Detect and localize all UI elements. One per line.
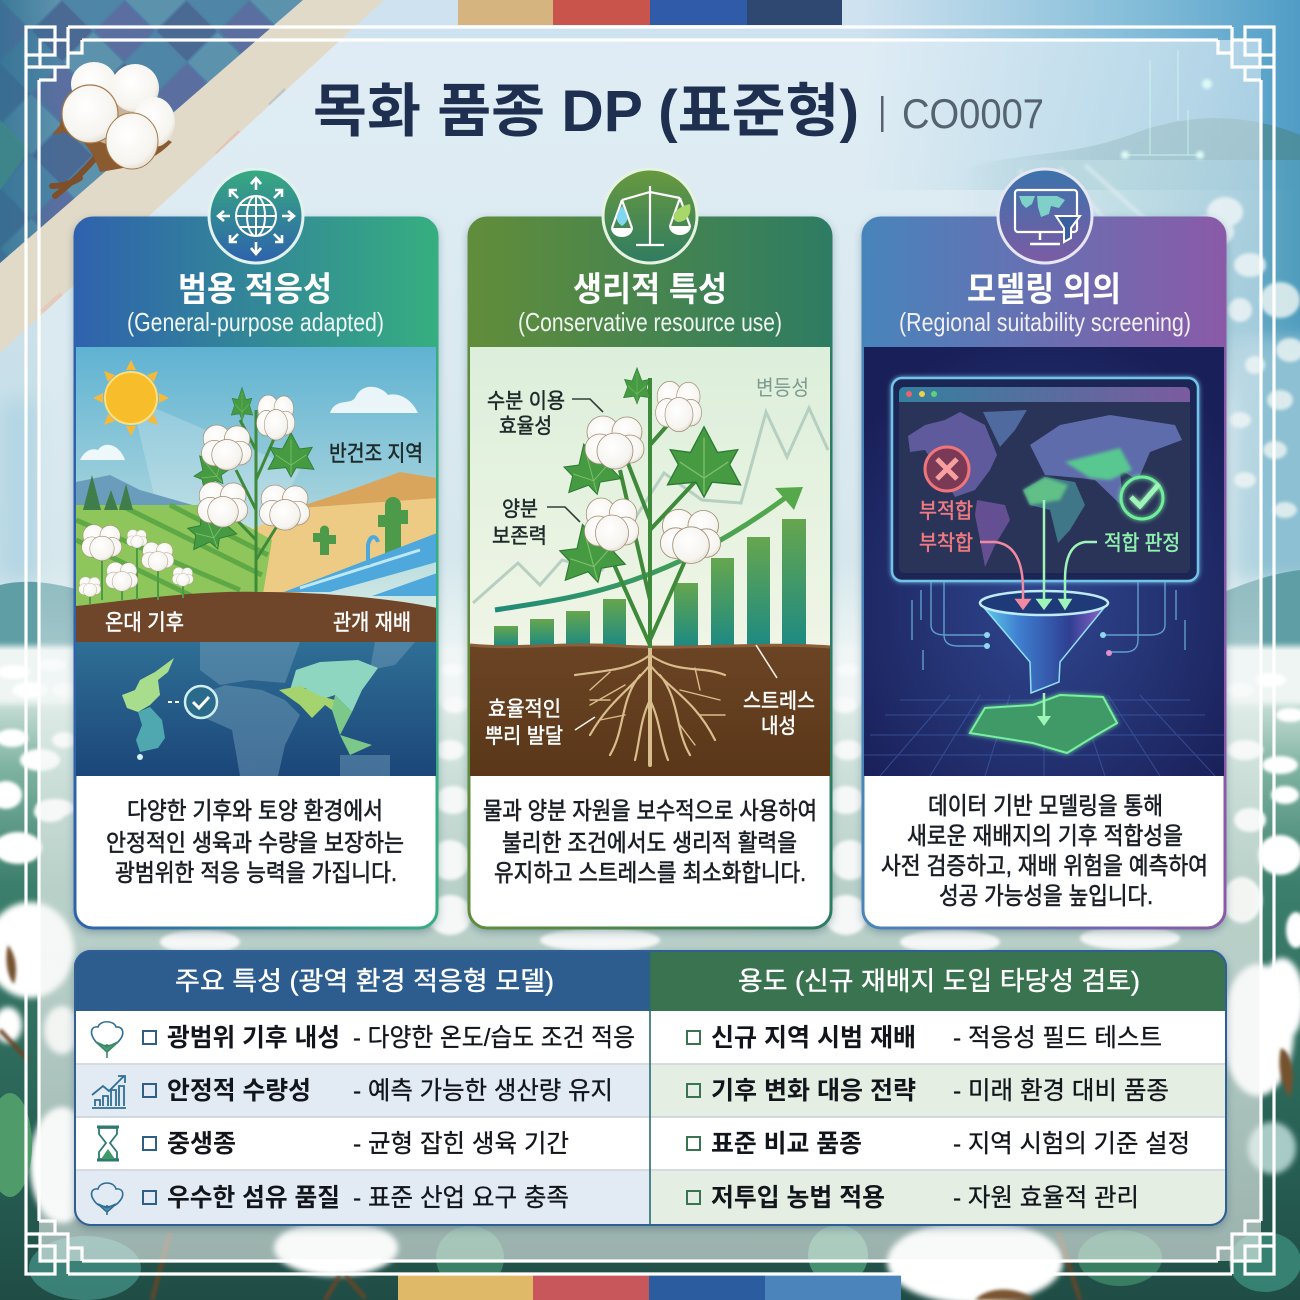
label: 반건조 지역 — [329, 441, 423, 466]
label: 온대 기후 — [105, 610, 184, 635]
right column rows: - 미래 환경 대비 품종 — [953, 1077, 1169, 1105]
left column rows: 광범위 기후 내성 — [167, 1024, 340, 1052]
panel: modeling significance — [863, 169, 1225, 928]
label: 뿌리 발달 — [485, 725, 563, 748]
label: 내성 — [761, 715, 796, 738]
left column rows: - 예측 가능한 생산량 유지 — [353, 1077, 613, 1105]
icon: cotton — [92, 1022, 123, 1058]
description: 다양한 기후와 토양 환경에서 — [127, 798, 383, 825]
left column rows: 안정적 수량성 — [167, 1077, 311, 1105]
fabric corner — [0, 0, 384, 353]
large bolls — [0, 878, 1300, 1300]
right column rows: 신규 지역 시범 재배 — [711, 1024, 916, 1052]
screen — [892, 378, 1198, 581]
left column rows — [167, 1024, 635, 1212]
right column header — [650, 951, 1226, 1011]
right column rows: - 자원 효율적 관리 — [953, 1184, 1139, 1212]
description: 성공 가능성을 높입니다. — [939, 883, 1153, 910]
icon: globe with arrows — [209, 169, 303, 263]
heading: 용도 (신규 재배지 도입 타당성 검토) — [738, 966, 1140, 996]
label: 관개 재배 — [333, 610, 411, 635]
description — [881, 793, 1208, 910]
description — [483, 798, 817, 887]
left column rows: - 표준 산업 요구 충족 — [353, 1184, 569, 1212]
right column rows: - 적응성 필드 테스트 — [953, 1024, 1162, 1052]
description: 유지하고 스트레스를 최소화합니다. — [494, 860, 806, 887]
icon: approved — [1121, 477, 1163, 519]
left column rows: 우수한 섬유 품질 — [167, 1184, 340, 1212]
sun — [93, 360, 169, 436]
icon: hourglass — [97, 1127, 119, 1160]
leader lines — [547, 399, 603, 522]
code label: CO0007 — [902, 90, 1044, 137]
bar chart — [494, 519, 806, 646]
left column rows: - 다양한 온도/습도 조건 적응 — [353, 1024, 635, 1052]
right column rows — [711, 1024, 1190, 1212]
checkboxes — [143, 1031, 156, 1204]
subheading: (Regional suitability screening) — [899, 307, 1191, 337]
grid floor — [864, 695, 1224, 776]
panel: physiological traits — [469, 169, 831, 928]
label: 양분 — [502, 498, 538, 521]
right column rows: 표준 비교 품종 — [711, 1130, 862, 1158]
top colour strip — [458, 0, 842, 25]
description: 광범위한 적응 능력을 가집니다. — [115, 860, 397, 887]
right column rows: 기후 변화 대응 전략 — [711, 1077, 916, 1105]
circuit traces — [912, 582, 1185, 670]
header band — [469, 218, 831, 347]
description: 물과 양분 자원을 보수적으로 사용하여 — [483, 798, 817, 825]
map strip — [76, 642, 436, 776]
arrow: rising trend — [495, 487, 803, 610]
label: 적합 판정 — [1104, 532, 1180, 555]
bottom colour strip — [398, 1275, 901, 1300]
icon: monitor with funnel — [998, 169, 1092, 263]
roots — [575, 645, 725, 765]
left column rows: - 균형 잡힌 생육 기간 — [353, 1130, 569, 1158]
description — [106, 798, 404, 887]
left column header — [75, 951, 650, 1011]
description: 새로운 재배지의 기후 적합성을 — [907, 823, 1183, 850]
label: 수분 이용 — [487, 390, 565, 413]
heading: 생리적 특성 — [573, 271, 727, 309]
subheading: (Conservative resource use) — [518, 307, 782, 337]
table: characteristics and uses — [75, 951, 1226, 1225]
description: 사전 검증하고, 재배 위험을 예측하여 — [881, 853, 1208, 880]
heading: 주요 특성 (광역 환경 적응형 모델) — [175, 966, 554, 996]
icon: cotton boll top-left — [52, 62, 175, 196]
label: 변등성 — [756, 377, 809, 400]
right column rows: - 지역 시험의 기준 설정 — [953, 1130, 1190, 1158]
heading: 모델링 의의 — [967, 271, 1121, 309]
checkboxes — [687, 1031, 700, 1204]
icon: cotton — [92, 1183, 123, 1215]
title: 목화 품종 DP (표준형) — [313, 79, 859, 144]
panel: general-purpose adaptability — [75, 169, 437, 928]
divider — [881, 96, 884, 132]
heading: 범용 적응성 — [178, 271, 332, 309]
description: 데이터 기반 모델링을 통해 — [928, 793, 1163, 820]
label: 효율적인 — [488, 698, 561, 721]
header band — [863, 218, 1225, 347]
icon: growth chart — [92, 1076, 126, 1108]
illustration: suitability screening funnel — [864, 347, 1224, 776]
label: 부착합 — [919, 532, 973, 555]
subheading: (General-purpose adapted) — [127, 307, 384, 337]
description: 안정적인 생육과 수량을 보장하는 — [106, 830, 404, 857]
arrows into funnel — [980, 500, 1097, 608]
illustration: plant with growth bars and roots — [470, 347, 830, 776]
selected region — [970, 693, 1117, 753]
icon: balance scale — [603, 169, 697, 263]
label: 효율성 — [499, 415, 552, 438]
left column rows: 중생종 — [167, 1130, 236, 1158]
icon: rejected — [925, 447, 969, 491]
label: 부적합 — [919, 500, 973, 523]
header band — [75, 218, 437, 347]
label: 보존력 — [492, 525, 547, 548]
funnel — [980, 591, 1108, 693]
label: 스트레스 — [743, 690, 815, 713]
description: 불리한 조건에서도 생리적 활력을 — [502, 830, 797, 857]
right column rows: 저투입 농법 적용 — [711, 1184, 885, 1212]
illustration: climates and plant — [76, 347, 437, 776]
world map — [908, 410, 1182, 567]
